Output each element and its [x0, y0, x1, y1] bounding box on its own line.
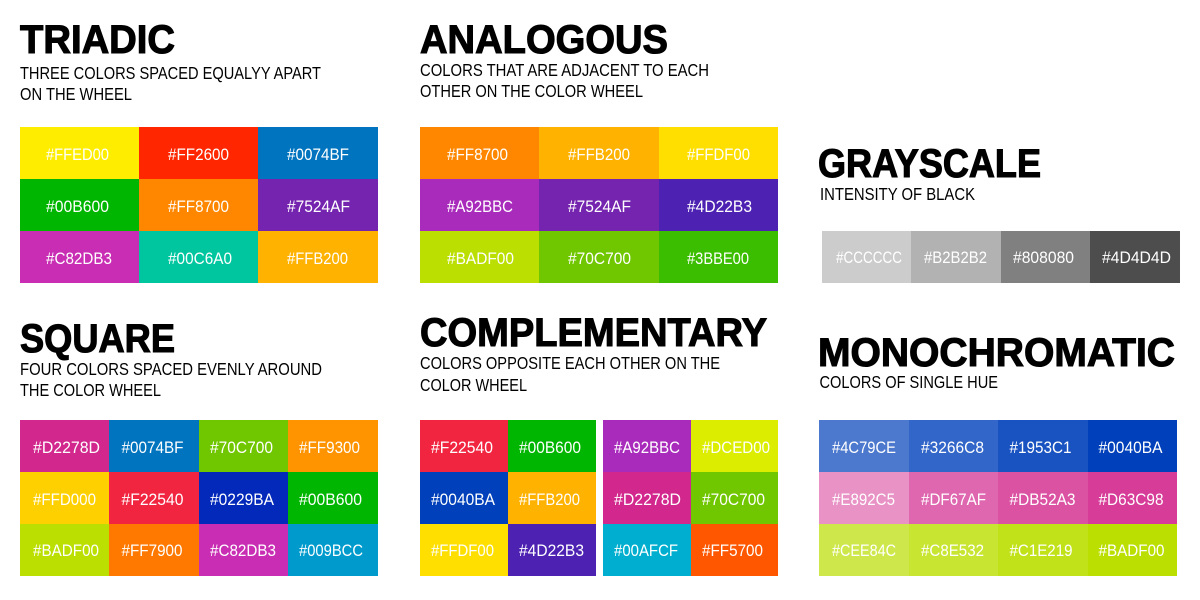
description: triadic: THREE COLORS SPACED EQUALYY APART [20, 63, 321, 83]
swatch grid: complementary right: #A92BBC [614, 438, 680, 457]
swatch grid: complementary left: #FFDF00 [431, 541, 494, 560]
swatch grid: analogous: #FFB200 [568, 145, 630, 164]
swatch grid: square: #FF7900 [122, 541, 182, 560]
description: square [20, 359, 322, 400]
swatch grid: square: #009BCC [299, 541, 363, 560]
swatch grid: square: #0074BF [122, 438, 184, 457]
swatch grid: monochromatic: #DB52A3 [1010, 490, 1076, 509]
swatch grid: grayscale [822, 231, 1180, 283]
swatch grid: complementary right: #70C700 [702, 490, 765, 509]
panel: triadic [20, 18, 378, 283]
panel: square [20, 317, 378, 576]
swatch grid: analogous: #7524AF [568, 197, 631, 216]
swatch grid: monochromatic: #BADF00 [1098, 541, 1164, 560]
description: square: THE COLOR WHEEL [20, 380, 161, 400]
description: analogous [420, 60, 709, 101]
swatch grid: grayscale: #4D4D4D [1102, 248, 1171, 267]
swatch grid: analogous: #FF8700 [447, 145, 508, 164]
swatch grid: grayscale: #CCCCCC [836, 248, 902, 267]
swatch grid: triadic: #00B600 [46, 197, 109, 216]
swatch grid: analogous: #BADF00 [447, 249, 514, 268]
swatch grid: monochromatic: #3266C8 [921, 438, 984, 457]
swatch grid: monochromatic: #C8E532 [921, 541, 984, 560]
swatch grid: analogous: #A92BBC [447, 197, 513, 216]
panel: complementary [420, 311, 778, 576]
swatch grid: square: #D2278D [33, 438, 100, 457]
swatch grid: analogous: #4D22B3 [687, 197, 752, 216]
swatch grid: triadic: #FF2600 [168, 145, 229, 164]
description: monochromatic: COLORS OF SINGLE HUE [820, 372, 998, 392]
swatch grid: monochromatic: #C1E219 [1010, 541, 1072, 560]
description: square: FOUR COLORS SPACED EVENLY AROUND [20, 359, 322, 379]
swatch grid: triadic: #00C6A0 [168, 249, 232, 268]
swatch grid: monochromatic: #1953C1 [1010, 438, 1072, 457]
swatch grid: square: #70C700 [210, 438, 273, 457]
description: triadic: ON THE WHEEL [20, 84, 132, 104]
swatch grid: complementary right [603, 420, 778, 576]
description: analogous: COLORS THAT ARE ADJACENT TO EACH [420, 60, 709, 80]
swatch grid: triadic [20, 127, 378, 283]
heading: complementary: COMPLEMENTARY [420, 311, 767, 355]
heading: square: SQUARE [20, 317, 175, 361]
swatch grid: complementary left [420, 420, 596, 576]
swatch grid: square: #F22540 [122, 490, 184, 509]
swatch grid: square: #0229BA [210, 490, 275, 509]
swatch grid: square: #FF9300 [299, 438, 360, 457]
swatch grid: square [20, 420, 378, 576]
swatch grid: grayscale: #B2B2B2 [924, 248, 987, 267]
swatch grid: complementary right: #00AFCF [614, 541, 678, 560]
swatch grid: complementary left: #FFB200 [519, 490, 580, 509]
swatch grid: square: #BADF00 [33, 541, 99, 560]
swatch grid: complementary right: #D2278D [614, 490, 681, 509]
swatch grid: complementary left: #00B600 [519, 438, 581, 457]
description: analogous: OTHER ON THE COLOR WHEEL [420, 81, 643, 101]
swatch grid: monochromatic: #0040BA [1098, 438, 1163, 457]
swatch grid: analogous: #3BBE00 [687, 249, 749, 268]
swatch grid: triadic: #7524AF [287, 197, 350, 216]
swatch grid: monochromatic: #4C79CE [832, 438, 896, 457]
panel: monochromatic [818, 331, 1177, 576]
swatch grid: triadic: #FFED00 [46, 145, 109, 164]
swatch grid: monochromatic: #DF67AF [921, 490, 986, 509]
heading: monochromatic: MONOCHROMATIC [818, 331, 1175, 375]
swatch grid: monochromatic: #CEE84C [832, 541, 896, 560]
swatch grid: square: #C82DB3 [210, 541, 276, 560]
swatch grid: square: #00B600 [299, 490, 362, 509]
description: complementary: COLORS OPPOSITE EACH OTHER ON THE [420, 353, 720, 373]
swatch grid: triadic: #FFB200 [287, 249, 348, 268]
description: grayscale: INTENSITY OF BLACK [820, 184, 975, 204]
panel: grayscale [818, 142, 1180, 283]
heading: triadic: TRIADIC [20, 18, 175, 62]
swatch grid: analogous: #FFDF00 [687, 145, 750, 164]
swatch grid: triadic: #FF8700 [168, 197, 229, 216]
swatch grid: complementary left: #0040BA [431, 490, 496, 509]
heading: analogous: ANALOGOUS [420, 18, 668, 62]
swatch grid: monochromatic: #D63C98 [1098, 490, 1164, 509]
swatch grid: complementary left: #4D22B3 [519, 541, 584, 560]
swatch grid: analogous: #70C700 [568, 249, 631, 268]
swatch grid: monochromatic [819, 420, 1177, 576]
heading: grayscale: GRAYSCALE [818, 142, 1041, 186]
description: triadic [20, 63, 321, 104]
swatch grid: monochromatic: #E892C5 [832, 490, 895, 509]
swatch grid: triadic: #C82DB3 [46, 249, 112, 268]
swatch grid: triadic: #0074BF [287, 145, 349, 164]
swatch grid: grayscale: #808080 [1013, 248, 1074, 267]
swatch grid: complementary right: #DCED00 [702, 438, 770, 457]
description: complementary: COLOR WHEEL [420, 375, 527, 395]
swatch grid: complementary left: #F22540 [431, 438, 493, 457]
panel: analogous [420, 18, 778, 283]
swatch grid: complementary right: #FF5700 [702, 541, 763, 560]
swatch grid: square: #FFD000 [33, 490, 96, 509]
swatch grid: analogous [420, 127, 778, 283]
description: complementary [420, 353, 720, 395]
